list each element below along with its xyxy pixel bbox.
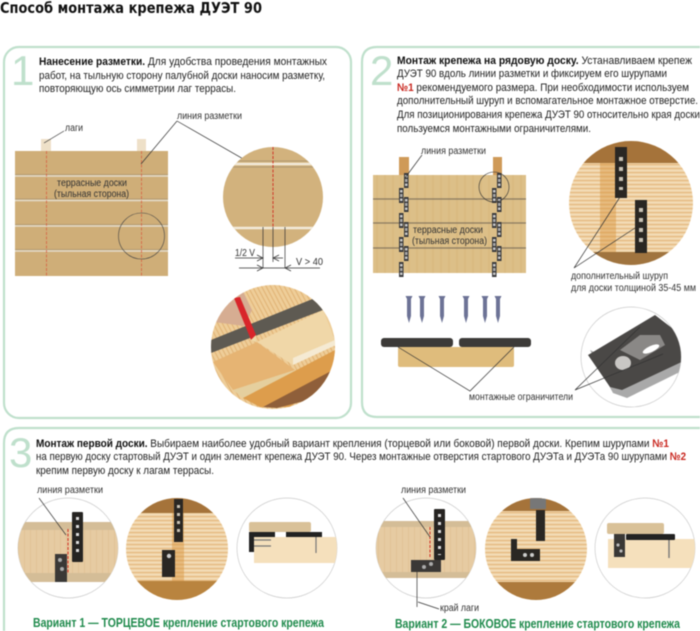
detail: mounting stop closeup <box>575 307 690 407</box>
step number 2: 2 <box>370 47 393 94</box>
deck boards back side diagram: террасные доски <box>57 178 127 189</box>
label: joists: лаги <box>65 123 83 134</box>
step 1 text: повторяющую ось симметрии лаг террасы. <box>39 83 236 95</box>
label: extra screw: дополнительный шуруп <box>571 271 668 282</box>
profile: fasteners and board <box>381 338 531 367</box>
detail circle with dimensions <box>220 147 325 271</box>
detail circle with dimensions: V > 40 <box>296 257 323 268</box>
variant 2 photo circle <box>484 495 589 602</box>
boards with fasteners diagram <box>373 157 526 277</box>
variant 2 diagram circle <box>375 498 480 598</box>
variant 2 section circle <box>595 498 695 598</box>
step 2 text: пользуемся монтажными ограничителями. <box>397 123 591 135</box>
variant 1 photo circle <box>125 495 230 601</box>
deck boards back side diagram: (тыльная сторона) <box>54 189 129 200</box>
detail circle with dimensions: 1/2 V <box>235 248 255 259</box>
variant 1 diagram circle <box>15 498 125 598</box>
label: marking line variant 2 <box>401 485 466 537</box>
panel: step 3 first board <box>4 428 700 631</box>
photo: marking with ruler and pencil <box>211 285 336 409</box>
label: marking line variant 1 <box>37 485 103 535</box>
screws <box>406 296 502 323</box>
label: marking line: линия разметки <box>177 111 242 122</box>
photo: fasteners on wood <box>568 140 694 266</box>
label: mounting stops <box>398 347 573 403</box>
label: joist edge <box>417 572 479 614</box>
step number 1: 1 <box>11 47 34 94</box>
step 2 text: Монтаж крепежа на рядовую доску. Устанавливаем крепеж <box>397 55 693 67</box>
step 3 text: крепим первую доску к лагам террасы. <box>36 465 214 477</box>
step 1 text: Нанесение разметки. Для удобства проведения монтажных <box>39 56 327 68</box>
panel: step 1 marking <box>4 47 351 418</box>
label: marking line variant 1: линия разметки <box>37 485 103 496</box>
label: marking line variant 2: линия разметки <box>401 485 466 496</box>
label: extra screw <box>571 197 696 294</box>
variant 1 section circle <box>237 498 337 598</box>
label: mounting stops: монтажные ограничители <box>469 392 573 403</box>
step 1 text: работ, на тыльную сторону палубной доски наносим разметку, <box>39 70 325 82</box>
boards with fasteners diagram: (тыльная сторона) <box>412 236 487 247</box>
label: joist edge: край лаги <box>440 603 479 614</box>
label: marking line <box>141 111 273 176</box>
variant 1 caption: Вариант 1 — ТОРЦЕВОЕ крепление стартового крепежа <box>33 616 325 630</box>
boards with fasteners diagram: террасные доски <box>413 225 483 236</box>
step 2 text: ДУЭТ 90 вдоль линии разметки и фиксируем его шурупами <box>397 68 667 80</box>
step 2 text <box>397 55 700 135</box>
step 3 text: Монтаж первой доски. Выбираем наиболее удобный вариант крепления (торцевой или боковой) первой доски. Крепим шурупами №1 <box>36 438 669 450</box>
label: joists <box>44 123 83 143</box>
deck boards back side diagram <box>15 139 168 276</box>
panel: step 2 fastening <box>362 47 700 417</box>
step 3 text <box>36 438 686 477</box>
step 1 text <box>39 56 327 95</box>
label: marking line <box>405 146 486 178</box>
label: marking line: линия разметки <box>421 146 486 157</box>
step number 3: 3 <box>9 429 32 476</box>
